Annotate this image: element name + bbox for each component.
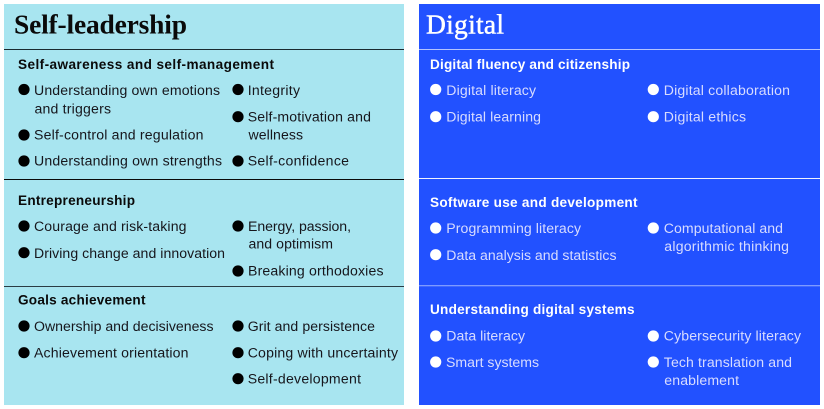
item: understanding own emotions and triggers: Understanding own emotions <box>34 82 220 98</box>
heading: digital fluency and citizenship: Digital fluency and citizenship <box>430 57 630 72</box>
item: integrity: Integrity <box>248 82 301 98</box>
item: tech translation and enablement: enablement <box>664 372 739 388</box>
section: goals achievement <box>18 293 399 387</box>
item: energy, passion, and optimism: Energy, passion, <box>248 218 351 234</box>
title: Digital: Digital <box>426 8 504 40</box>
item: self-motivation and wellness <box>232 108 371 142</box>
item: understanding own strengths: Understanding own strengths <box>34 152 222 168</box>
item: digital learning: Digital learning <box>446 108 541 124</box>
item: coping with uncertainty: Coping with uncertainty <box>248 345 399 361</box>
item: tech translation and enablement <box>648 354 792 388</box>
section: entrepreneurship <box>18 193 384 279</box>
section: digital fluency and citizenship <box>430 57 790 124</box>
item: courage and risk-taking: Courage and risk-taking <box>34 218 186 234</box>
item: programming literacy: Programming literacy <box>446 220 582 236</box>
item: cybersecurity literacy: Cybersecurity literacy <box>664 328 802 344</box>
item: ownership and decisiveness: Ownership and decisiveness <box>34 318 214 334</box>
item: grit and persistence: Grit and persistence <box>248 318 375 334</box>
item: computational and algorithmic thinking: algorithmic thinking <box>664 238 789 254</box>
item: understanding own emotions and triggers <box>18 82 220 116</box>
item: self-development: Self-development <box>248 371 361 387</box>
section: understanding digital systems <box>430 302 802 388</box>
heading: software use and development: Software use and development <box>430 195 638 210</box>
item: data analysis and statistics: Data analysis and statistics <box>446 247 616 263</box>
item: breaking orthodoxies: Breaking orthodoxies <box>248 263 384 279</box>
panel: self-leadership <box>4 4 404 405</box>
title: Self-leadership: Self-leadership <box>14 8 187 40</box>
item: self-motivation and wellness: Self-motivation and <box>248 108 371 124</box>
item: understanding own emotions and triggers: and triggers <box>34 100 111 116</box>
item: energy, passion, and optimism: and optimism <box>248 236 333 252</box>
panel: digital <box>419 4 820 405</box>
item: digital ethics: Digital ethics <box>664 108 746 124</box>
item: digital collaboration: Digital collaboration <box>664 82 790 98</box>
item: computational and algorithmic thinking: Computational and <box>664 220 783 236</box>
item: computational and algorithmic thinking <box>648 220 789 254</box>
item: self-confidence: Self-confidence <box>248 152 349 168</box>
item: smart systems: Smart systems <box>446 354 539 370</box>
section: self-awareness and self-management <box>18 57 371 168</box>
heading: goals achievement: Goals achievement <box>18 293 146 308</box>
item: energy, passion, and optimism <box>232 218 351 252</box>
item: digital literacy: Digital literacy <box>446 82 537 98</box>
item: tech translation and enablement: Tech translation and <box>664 354 792 370</box>
item: data literacy: Data literacy <box>446 328 526 344</box>
heading: self-awareness and self-management: Self-awareness and self-management <box>18 57 274 72</box>
heading: entrepreneurship: Entrepreneurship <box>18 193 135 208</box>
item: self-control and regulation: Self-control and regulation <box>34 126 204 142</box>
item: achievement orientation: Achievement orientation <box>34 345 188 361</box>
item: self-motivation and wellness: wellness <box>248 126 303 142</box>
heading: understanding digital systems: Understanding digital systems <box>430 302 634 317</box>
section: software use and development <box>430 195 789 263</box>
item: driving change and innovation: Driving change and innovation <box>34 245 225 261</box>
